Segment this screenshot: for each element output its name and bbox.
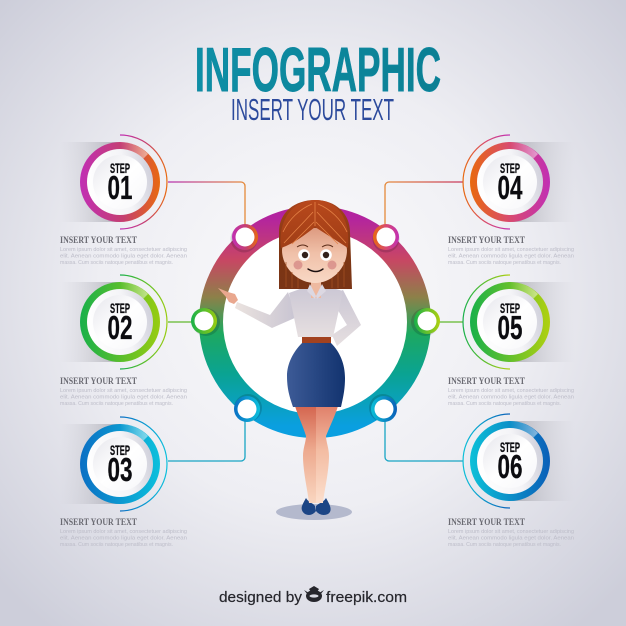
step 02 badge: STEP	[110, 300, 130, 316]
skirt	[287, 343, 345, 407]
step 03 text: INSERT YOUR TEXT	[60, 517, 137, 527]
hair strands	[283, 202, 347, 288]
step 06 badge: 06	[498, 448, 522, 485]
step 03 text: elit. Aenean commodo ligula eget dolor. Aenean	[60, 536, 187, 542]
step 05 badge: STEP	[500, 300, 520, 316]
shirt	[289, 285, 343, 337]
step 04 text: elit. Aenean commodo ligula eget dolor. Aenean	[448, 254, 574, 260]
step 03 badge: 03	[108, 451, 132, 488]
ring node: step 05	[411, 308, 440, 336]
face	[282, 228, 347, 283]
footer credit: designed by	[219, 589, 303, 606]
step 03 text: Lorem ipsum dolor sit amet, consectetuer adipiscing	[60, 529, 187, 535]
step 05 text: massa. Cum sociis natoque penatibus et magnis.	[448, 401, 561, 407]
step 05 text	[448, 376, 574, 407]
title: INFOGRAPHIC	[195, 36, 441, 105]
step 04 badge: STEP	[500, 160, 520, 176]
icon: freepik logo	[304, 586, 324, 602]
step 04 text	[448, 235, 574, 266]
mouth	[308, 269, 323, 272]
step 02 text: elit. Aenean commodo ligula eget dolor. Aenean	[60, 394, 187, 400]
connector: step 06	[385, 420, 463, 461]
connector: step 04	[385, 182, 463, 226]
step 01 text	[60, 235, 187, 266]
step 02 text: INSERT YOUR TEXT	[60, 376, 137, 386]
connector: step 01	[168, 182, 245, 226]
step 04 text: massa. Cum sociis natoque penatibus et magnis.	[448, 260, 561, 266]
step 04 text: INSERT YOUR TEXT	[448, 235, 525, 245]
neck and collar	[307, 278, 326, 299]
step 01 text: INSERT YOUR TEXT	[60, 235, 137, 245]
subtitle: INSERT YOUR TEXT	[231, 92, 394, 127]
step 01 badge: 01	[108, 169, 132, 206]
hair back	[279, 200, 352, 289]
step 02 text: Lorem ipsum dolor sit amet, consectetuer adipiscing	[60, 388, 187, 394]
ring node: step 06	[369, 394, 397, 422]
step 06 text: massa. Cum sociis natoque penatibus et magnis.	[448, 542, 561, 548]
connector: step 03	[168, 420, 245, 461]
ring node: step 04	[372, 224, 400, 252]
step 03 text: massa. Cum sociis natoque penatibus et magnis.	[60, 542, 173, 548]
step 02 text: massa. Cum sociis natoque penatibus et magnis.	[60, 401, 173, 407]
step 04 text: Lorem ipsum dolor sit amet, consectetuer adipiscing	[448, 247, 574, 253]
step 05 text: INSERT YOUR TEXT	[448, 376, 525, 386]
cheeks	[294, 260, 336, 270]
eyes	[297, 245, 333, 261]
ring node: step 02	[191, 308, 220, 336]
belt	[302, 337, 331, 343]
step 01 text: elit. Aenean commodo ligula eget dolor. Aenean	[60, 254, 187, 260]
step 01 badge: STEP	[110, 160, 130, 176]
step 06 text: INSERT YOUR TEXT	[448, 517, 525, 527]
central gradient ring	[211, 218, 419, 426]
shoes	[302, 498, 331, 515]
footer credit: freepik.com	[326, 589, 407, 606]
ring node: step 01	[230, 224, 258, 252]
fringe	[281, 200, 348, 248]
right arm	[332, 290, 361, 346]
step 04 badge: 04	[498, 169, 523, 206]
step 01 badge	[60, 135, 167, 229]
floor shadow	[276, 504, 352, 520]
connector: step 05	[439, 321, 463, 323]
step 05 badge	[463, 275, 575, 369]
step 06 text: Lorem ipsum dolor sit amet, consectetuer adipiscing	[448, 529, 574, 535]
step 02 badge	[60, 275, 167, 369]
step 05 text: Lorem ipsum dolor sit amet, consectetuer adipiscing	[448, 388, 574, 394]
legs	[295, 406, 338, 503]
step 04 badge	[463, 135, 575, 229]
left arm and hand	[218, 288, 297, 328]
step 02 badge: 02	[108, 309, 132, 346]
step 01 text: Lorem ipsum dolor sit amet, consectetuer adipiscing	[60, 247, 187, 253]
step 06 text: elit. Aenean commodo ligula eget dolor. Aenean	[448, 536, 574, 542]
step 01 text: massa. Cum sociis natoque penatibus et magnis.	[60, 260, 173, 266]
step 06 badge	[463, 414, 575, 508]
step 06 badge: STEP	[500, 439, 520, 455]
ring node: step 03	[234, 394, 262, 422]
step 03 text	[60, 517, 187, 548]
step 03 badge: STEP	[110, 442, 130, 458]
connector: step 02	[168, 321, 192, 323]
step 02 text	[60, 376, 187, 407]
step 03 badge	[60, 417, 167, 511]
footer credit	[219, 586, 407, 606]
person illustration	[218, 200, 361, 520]
step 05 badge: 05	[498, 309, 522, 346]
step 05 text: elit. Aenean commodo ligula eget dolor. Aenean	[448, 394, 574, 400]
step 06 text	[448, 517, 574, 548]
